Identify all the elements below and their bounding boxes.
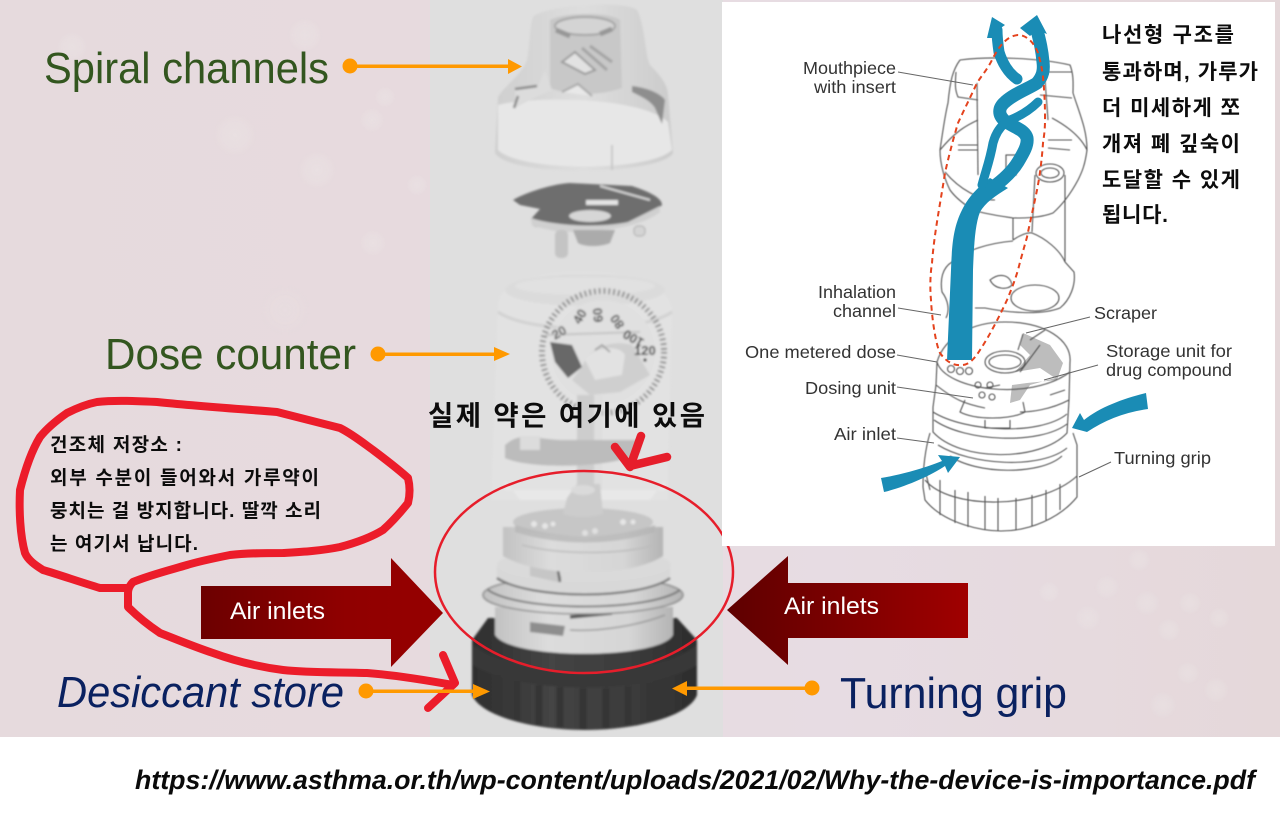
pointer arrow: dose counter <box>370 346 510 362</box>
part labels: with insert <box>813 77 896 97</box>
part labels: channel <box>833 301 896 321</box>
dose dial: 100 <box>620 327 646 350</box>
korean explanation text: 더 미세하게 쪼 <box>1102 97 1240 120</box>
upper ring <box>497 565 670 594</box>
red dashed spiral zone outline <box>930 35 1045 365</box>
metering disc <box>513 183 662 258</box>
red checkmark arrow <box>615 436 667 467</box>
exploded inhaler photo <box>472 5 697 730</box>
label: Desiccant store: Desiccant store <box>57 668 344 717</box>
right air inlets arrow <box>727 556 968 665</box>
korean explanation text: 개져 폐 깊숙이 <box>1102 133 1240 156</box>
black turning grip <box>472 618 697 730</box>
part labels: Scraper <box>1094 303 1157 323</box>
label: Spiral channels: Spiral channels <box>44 44 329 93</box>
korean explanation text: 나선형 구조를 <box>1102 24 1234 47</box>
blue stream arrowheads <box>987 15 1047 38</box>
inner mechanism: dose unit and rings <box>483 484 683 654</box>
central post <box>563 484 603 517</box>
transparent dose counter housing <box>491 272 672 500</box>
lower cylinder <box>495 607 673 654</box>
flange <box>483 576 683 614</box>
part labels: Mouthpiece <box>803 58 896 78</box>
grey drug compound storage <box>1010 333 1063 403</box>
blue inlet arrow right <box>1072 393 1148 432</box>
callout text: desiccant store explanation: 뭉치는 걸 방지합니다. 딸깍 소리 <box>50 500 321 522</box>
annotation: actual drug location: 실제 약은 여기에 있음 <box>428 400 705 431</box>
callout text: desiccant store explanation <box>50 434 321 555</box>
leader lines <box>897 72 1111 477</box>
right air inlets arrow: Air inlets <box>784 593 879 620</box>
dose dial: 120 <box>634 343 656 358</box>
label: Dose counter: Dose counter <box>105 330 356 379</box>
white footer band <box>0 737 1280 827</box>
part labels: Air inlet <box>834 424 896 444</box>
blue airflow spiral stream <box>947 30 1043 360</box>
source URL: https://www.asthma.or.th/wp-content/uploads/2021/02/Why-the-device-is-importance.pdf <box>135 765 1258 795</box>
part labels: Storage unit for <box>1106 341 1232 361</box>
panel: airflow line diagram <box>722 2 1275 546</box>
part labels: Dosing unit <box>805 378 896 398</box>
label: Turning grip: Turning grip <box>840 669 1067 718</box>
dose dial: 40 <box>570 306 590 326</box>
line drawing of opened inhaler <box>923 58 1087 531</box>
pointer arrow: desiccant store <box>358 684 490 699</box>
callout text: desiccant store explanation: 는 여기서 납니다. <box>50 533 198 555</box>
left air inlets arrow <box>201 558 443 667</box>
part labels: Inhalation <box>818 282 896 302</box>
pointer arrow: turning grip <box>672 680 820 696</box>
dosing ring <box>503 527 663 572</box>
left air inlets arrow: Air inlets <box>230 598 325 625</box>
dose dial: 20 <box>549 322 569 343</box>
dose dial <box>542 291 664 413</box>
mouthpiece cap with spiral channels <box>495 5 673 171</box>
part labels <box>745 58 1232 468</box>
callout text: desiccant store explanation: 외부 수분이 들어와서 가루약이 <box>50 467 319 489</box>
part labels: drug compound <box>1106 360 1232 380</box>
callout text: desiccant store explanation: 건조체 저장소 : <box>50 434 182 456</box>
red circle around drug reservoir <box>435 471 733 673</box>
dose dial: 60 <box>590 307 606 323</box>
dose dial: 80 <box>607 311 627 332</box>
korean explanation text: 도달할 수 있게 <box>1102 169 1240 192</box>
grey central photo panel <box>430 0 723 737</box>
part labels: Turning grip <box>1114 448 1211 468</box>
korean explanation text: 됩니다. <box>1102 204 1168 227</box>
hand-drawn red callout loop <box>20 401 455 708</box>
korean explanation text <box>1102 24 1258 227</box>
korean explanation text: 통과하며, 가루가 <box>1102 61 1258 84</box>
blue inlet arrow left <box>881 455 960 492</box>
pointer arrow: spiral channels <box>342 58 522 74</box>
part labels: One metered dose <box>745 342 896 362</box>
